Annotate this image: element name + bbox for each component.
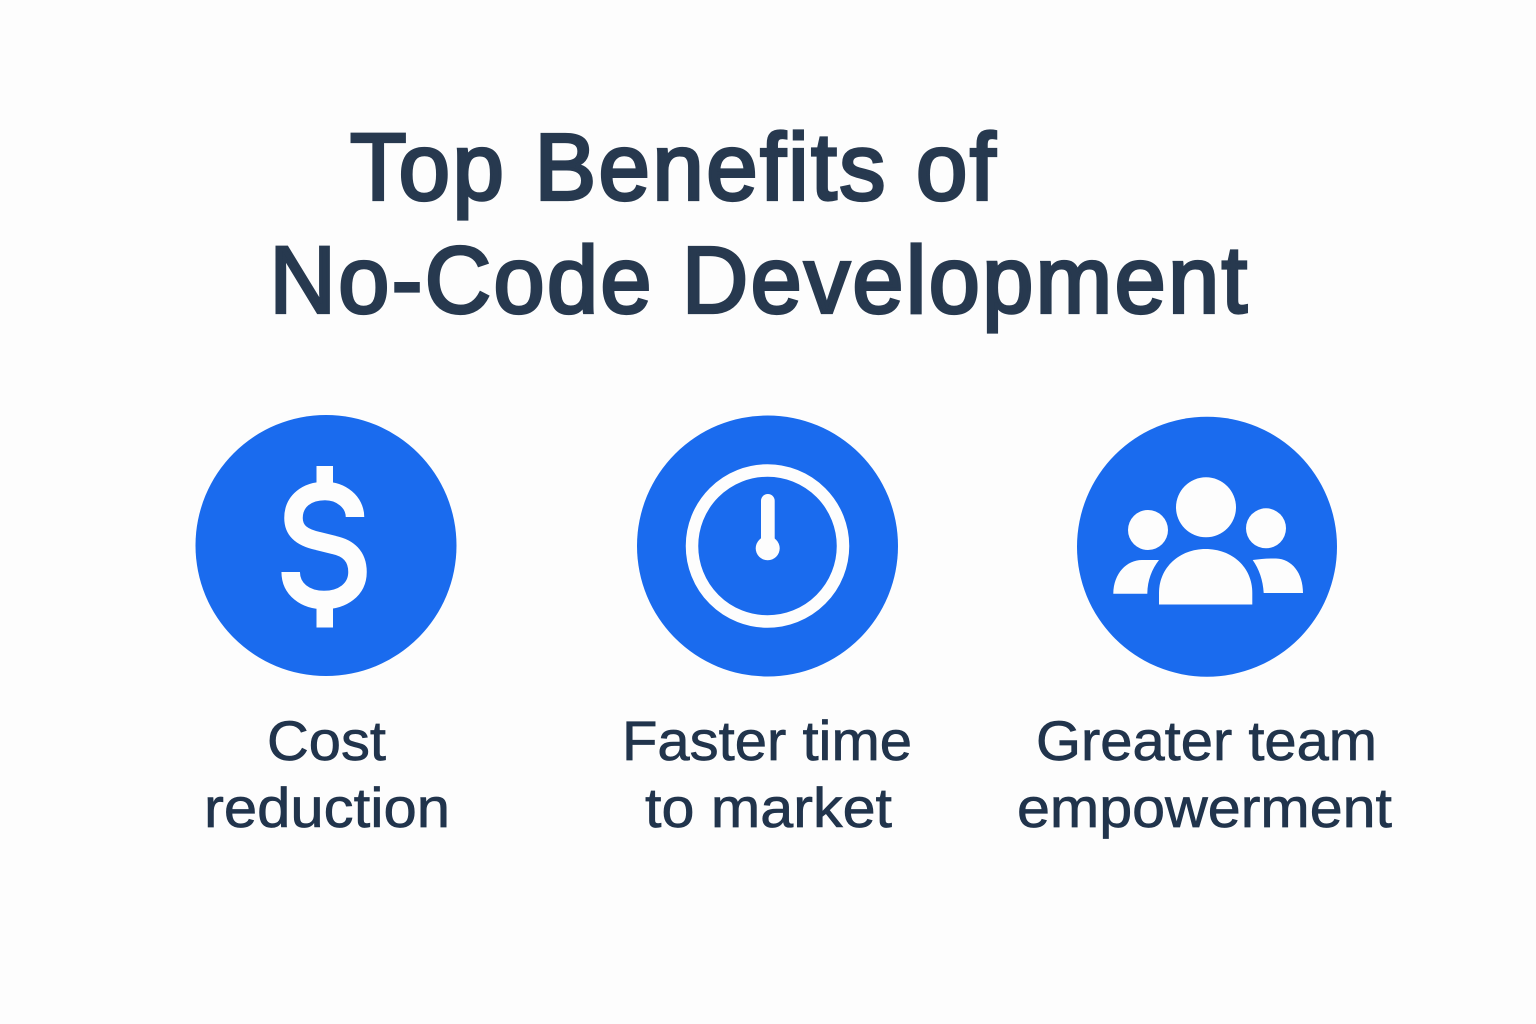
title — [270, 114, 1250, 334]
icon: clock — [637, 416, 898, 676]
label: greater team empowerment: Greater team — [1036, 709, 1377, 772]
label: greater team empowerment — [1017, 709, 1392, 839]
panel: greater team empowerment — [1017, 417, 1392, 839]
title: Top Benefits of — [350, 114, 998, 220]
label: faster time to market: Faster time — [622, 709, 912, 772]
panel: cost reduction — [196, 415, 456, 839]
label: greater team empowerment: empowerment — [1017, 776, 1392, 839]
panel: faster time to market — [622, 416, 912, 839]
label: cost reduction: Cost — [267, 709, 386, 772]
icon: team of people — [1077, 417, 1337, 677]
label: cost reduction — [204, 709, 450, 839]
title: No-Code Development — [270, 228, 1250, 334]
icon: dollar sign — [196, 415, 456, 676]
label: faster time to market — [622, 709, 912, 839]
label: faster time to market: to market — [645, 776, 892, 839]
label: cost reduction: reduction — [204, 776, 450, 839]
